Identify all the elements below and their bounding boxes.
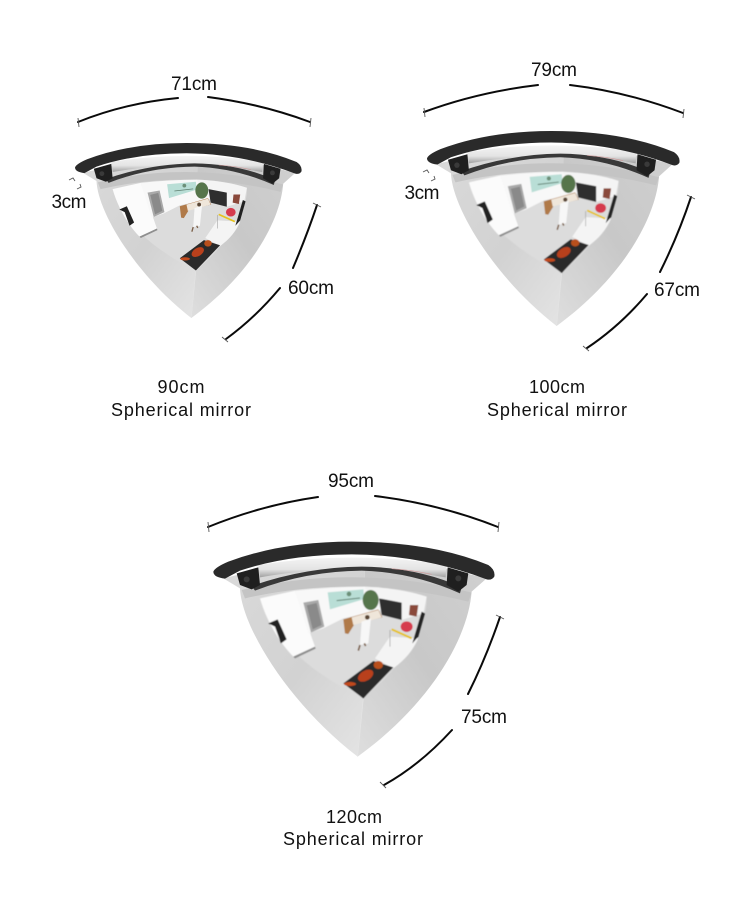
- depth arc lower: [380, 730, 452, 788]
- rim ticks: [69, 178, 81, 189]
- panel: 100cm mirror: [404, 60, 700, 420]
- size caption: 90cm: [158, 377, 204, 397]
- depth arc upper: [468, 615, 504, 694]
- rim label: 3cm: [52, 192, 86, 213]
- depth label: 60cm: [288, 278, 334, 299]
- width label: 79cm: [531, 60, 577, 81]
- depth arc lower: [222, 288, 280, 342]
- icon: 90cm mirror photo: [75, 143, 302, 318]
- type caption: Spherical mirror: [487, 400, 627, 420]
- size caption: 100cm: [529, 377, 585, 397]
- icon: 100cm mirror photo: [427, 131, 680, 326]
- width arc right: [375, 496, 499, 532]
- width arc left: [78, 98, 178, 127]
- panel: 120cm mirror: [208, 471, 507, 849]
- depth arc lower: [583, 294, 647, 351]
- panel: 90cm mirror: [52, 74, 334, 420]
- width label: 71cm: [171, 74, 217, 95]
- width label: 95cm: [328, 471, 374, 492]
- icon: 120cm mirror photo: [213, 542, 495, 757]
- width arc left: [208, 497, 318, 532]
- depth label: 67cm: [654, 280, 700, 301]
- width arc left: [424, 85, 538, 117]
- rim label: 3cm: [404, 183, 440, 204]
- type caption: Spherical mirror: [283, 829, 423, 849]
- width arc right: [208, 97, 311, 127]
- rim ticks: [423, 170, 435, 181]
- depth arc upper: [293, 203, 321, 268]
- depth label: 75cm: [461, 707, 507, 728]
- width arc right: [570, 85, 684, 118]
- size caption: 120cm: [326, 807, 382, 827]
- type caption: Spherical mirror: [111, 400, 251, 420]
- depth arc upper: [660, 195, 695, 272]
